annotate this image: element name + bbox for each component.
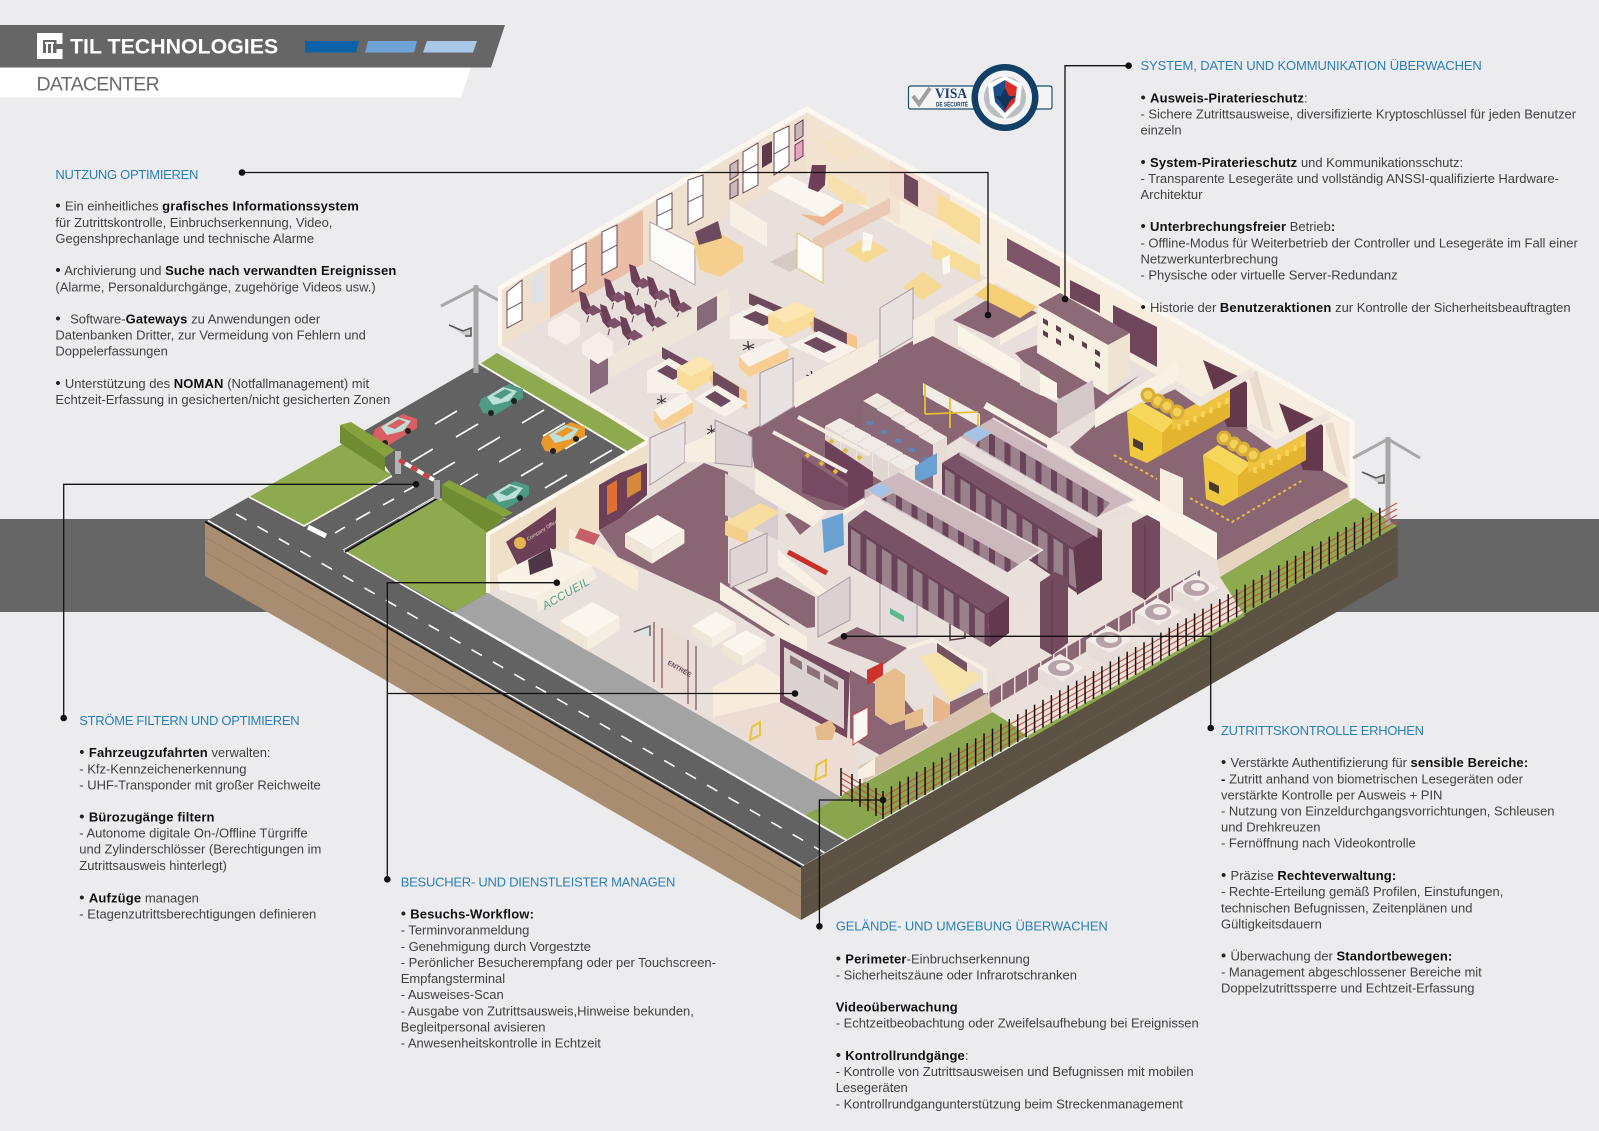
body text: - Kfz-Kennzeichenerkennung	[79, 761, 246, 776]
conference room	[548, 222, 730, 394]
reception label: ACCUEIL	[540, 576, 592, 613]
body text: - Fernöffnung nach Videokontrolle	[1221, 836, 1416, 851]
subtitle: DATACENTER	[36, 74, 160, 96]
body text: - Management abgeschlossener Bereiche mit	[1221, 965, 1482, 980]
isometric data centre illustration	[205, 109, 1420, 920]
panel: Ströme filtern und optimieren	[79, 713, 321, 921]
body text: - Genehmigung durch Vorgestzte	[401, 939, 591, 954]
body text: Netzwerkunterbrechung	[1140, 251, 1278, 266]
body text: - Kontrolle von Zutrittsausweisen und Befugnissen mit mobilen	[836, 1064, 1194, 1079]
body text: • Überwachung der Standortbewegen:	[1221, 948, 1452, 965]
body text: verstärkte Kontrolle per Ausweis + PIN	[1221, 787, 1442, 802]
company name: TIL TECHNOLOGIES	[70, 34, 278, 58]
body text: • Bürozugänge filtern	[79, 809, 215, 826]
server rows	[848, 418, 1160, 655]
sign text: Company Office	[526, 519, 559, 543]
mauve floors	[599, 292, 1348, 755]
body text: für Zutrittskontrolle, Einbruchserkennung, Video,	[55, 215, 332, 230]
body text: und Zylinderschlösser (Berechtigungen im	[79, 842, 321, 857]
grass and ground	[249, 353, 1397, 840]
body text: - Terminvoranmeldung	[401, 923, 529, 938]
body text: - Zutritt anhand von biometrischen Lesegeräten oder	[1221, 771, 1524, 786]
leader lines	[60, 62, 1214, 930]
icon: TIL logo	[37, 33, 62, 59]
heading: NUTZUNG OPTIMIEREN	[55, 167, 198, 182]
body text: • Historie der Benutzeraktionen zur Kontrolle der Sicherheitsbeauftragten	[1140, 299, 1571, 316]
body text: - Echtzeitbeobachtung oder Zweifelsaufhebung bei Ereignissen	[836, 1016, 1199, 1031]
visa subtitle: DE SÉCURITÉ	[936, 100, 968, 108]
parked cars	[373, 384, 585, 513]
grey horizontal band	[0, 519, 1599, 612]
loading dock	[713, 638, 992, 797]
generator room	[1047, 360, 1347, 560]
visa text: VISA	[935, 86, 967, 102]
heading: ZUTRITTSKONTROLLE ERHOHEN	[1221, 723, 1424, 738]
body text: - Offline-Modus für Weiterbetrieb der Controller und Lesegeräte im Fall einer	[1140, 235, 1578, 250]
light pole left	[441, 285, 498, 373]
body text: - Ausweises-Scan	[401, 987, 504, 1002]
reception and lobby	[497, 463, 766, 710]
header white strip	[0, 67, 471, 98]
body text: (Alarme, Personaldurchgänge, zugehörige Videos usw.)	[55, 279, 376, 294]
body text: Doppelerfassungen	[55, 344, 168, 359]
body text: • Ein einheitliches grafisches Informationssystem	[55, 198, 359, 215]
body text: - Kontrollrundgangunterstützung beim Streckenmanagement	[836, 1096, 1183, 1111]
body text: technischen Befugnissen, Zeitenplänen und	[1221, 900, 1472, 915]
body text: Videoüberwachung	[836, 1000, 958, 1015]
desks	[647, 221, 857, 434]
body text	[401, 905, 716, 1051]
hedges and barrier	[340, 422, 513, 533]
body text: - Nutzung von Einzeldurchgangsvorrichtungen, Schleusen	[1221, 804, 1555, 819]
body text: Lesegeräten	[836, 1080, 908, 1095]
entrance label: ENTRÉE	[666, 658, 694, 679]
body text: Empfangsterminal	[401, 971, 505, 986]
body text: • Unterstützung des NOMAN (Notfallmanagement) mit	[55, 375, 369, 392]
body text: • Besuchs-Workflow:	[401, 905, 534, 922]
body text: - Etagenzutrittsberechtigungen definieren	[79, 906, 316, 921]
central corridor walls and glass	[720, 405, 1150, 655]
body text: - Sicherheitszäune oder Infrarotschranken	[836, 967, 1077, 982]
panel: Zutrittskontrolle erhöhen	[1221, 723, 1555, 996]
panel: Gelände und Umgebung	[836, 919, 1199, 1111]
heading: STRÖME FILTERN UND OPTIMIEREN	[79, 713, 299, 728]
body text	[836, 950, 1199, 1111]
panel: System, Daten und Kommunikation	[1140, 58, 1578, 316]
security visa badge	[908, 64, 1052, 131]
body text: Zutrittsausweis hinterlegt)	[79, 858, 227, 873]
tan plinth	[858, 487, 1353, 782]
body text: und Drehkreuzen	[1221, 820, 1320, 835]
body text: • Präzise Rechteverwaltung:	[1221, 867, 1396, 884]
body text: Gegenshprechanlage und technische Alarme	[55, 231, 314, 246]
body text: - Sichere Zutrittsausweise, diversifizierte Kryptoschlüssel für jeden Benutzer	[1140, 106, 1577, 122]
body text: • Software-Gateways zu Anwendungen oder	[55, 311, 321, 328]
right pole	[1353, 437, 1420, 525]
body text: Datenbanken Dritter, zur Vermeidung von Fehlern und	[55, 328, 366, 343]
header	[0, 25, 505, 98]
break room	[845, 193, 980, 300]
windows	[507, 126, 789, 328]
body text	[55, 198, 396, 407]
body text: • Kontrollrundgänge:	[836, 1047, 969, 1064]
body text: - Physische oder virtuelle Server-Redundanz	[1140, 268, 1398, 282]
colour bars	[305, 41, 477, 52]
body text: • Perimeter-Einbruchserkennung	[836, 950, 1030, 967]
body text: • Aufzüge managen	[79, 889, 199, 906]
body text	[79, 744, 321, 921]
body text: - Autonome digitale On-/Offline Türgriffe	[79, 826, 308, 841]
body text: Begleitpersonal avisieren	[401, 1019, 545, 1034]
body text: • Ausweis-Piraterieschutz:	[1140, 89, 1308, 106]
perimeter fence	[841, 503, 1397, 819]
body text: - UHF-Transponder mit großer Reichweite	[79, 778, 321, 792]
tiled service yard	[992, 505, 1243, 736]
body text: Doppelzutrittssperre und Echtzeit-Erfassung	[1221, 981, 1474, 996]
heading: GELÄNDE- UND UMGEBUNG ÜBERWACHEN	[836, 919, 1108, 934]
storage racks and cabinets	[773, 383, 980, 553]
low wall along fence	[987, 570, 1200, 708]
heading: BESUCHER- UND DIENSTLEISTER MANAGEN	[401, 875, 675, 890]
building floor	[488, 165, 1353, 797]
body text	[1221, 754, 1555, 996]
rooftop condensers	[1038, 574, 1219, 696]
panel: Besucher und Dienstleister	[401, 875, 716, 1051]
body text: einzeln	[1140, 123, 1182, 138]
body text: • Fahrzeugzufahrten verwalten:	[79, 744, 271, 761]
electrical cabinets	[1037, 280, 1157, 433]
road and parking	[205, 364, 846, 867]
body text: - Ausgabe von Zutrittsausweis,Hinweise bekunden,	[401, 1003, 694, 1018]
body text: • Unterbrechungsfreier Betrieb:	[1140, 218, 1335, 235]
manager office	[730, 165, 890, 272]
heading: SYSTEM, DATEN UND KOMMUNIKATION ÜBERWACHEN	[1140, 58, 1482, 73]
body text: Echtzeit-Erfassung in gesicherten/nicht gesicherten Zonen	[55, 392, 390, 407]
office partition and glass doors	[650, 288, 935, 485]
body text: - Anwesenheitskontrolle in Echtzeit	[401, 1036, 601, 1051]
panel: Nutzung optimieren	[55, 167, 396, 407]
body text: Gültigkeitsdauern	[1221, 916, 1322, 931]
soil block	[205, 522, 1398, 920]
body text: • Verstärkte Authentifizierung für sensible Bereiche:	[1221, 754, 1528, 771]
security office	[933, 238, 1060, 400]
header grey strip	[0, 25, 505, 68]
wall posters	[531, 120, 918, 306]
body text: - Perönlicher Besucherempfang oder per Touchscreen-	[401, 955, 716, 970]
back walls	[488, 109, 1352, 593]
body text: • System-Piraterieschutz und Kommunikationsschutz:	[1140, 154, 1463, 171]
body text: - Rechte-Erteilung gemäß Profilen, Einstufungen,	[1221, 884, 1503, 899]
body text: Architektur	[1140, 187, 1203, 202]
body text: - Transparente Lesegeräte und vollständig ANSSI-qualifizierte Hardware-	[1140, 171, 1559, 186]
body text	[1140, 89, 1578, 316]
body text: • Archivierung und Suche nach verwandten Ereignissen	[55, 262, 396, 279]
